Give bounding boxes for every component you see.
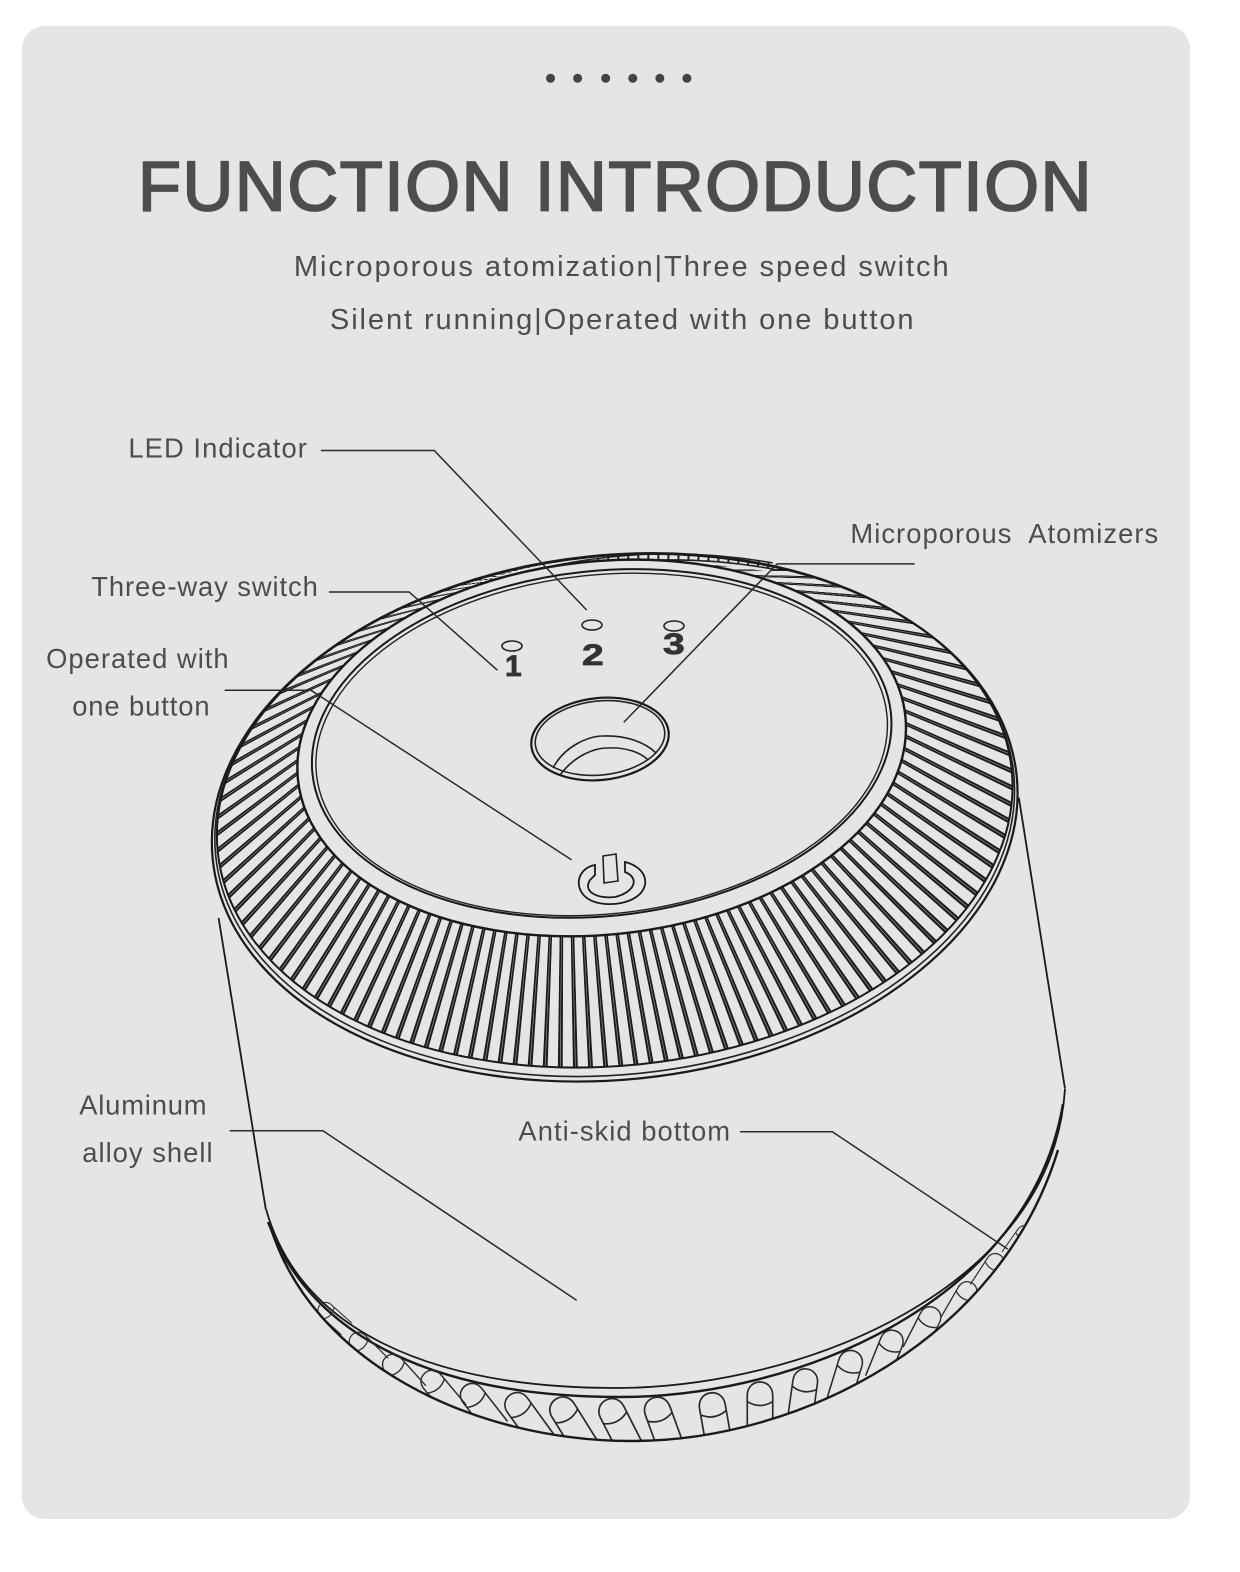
illustration: humidifier line drawing — [210, 552, 1066, 1442]
label: anti-skid bottom — [518, 1116, 1008, 1249]
device outlines — [210, 552, 1066, 1442]
label: operated with one button: Operated with — [46, 643, 229, 674]
label: three-way switch: Three-way switch — [91, 571, 318, 602]
cylinder body sides — [219, 798, 1065, 1209]
label: three-way switch — [91, 571, 497, 670]
decorative dot row — [546, 74, 691, 83]
text group — [46, 74, 1158, 1300]
base bottom edge — [270, 1150, 1058, 1441]
label: aluminum alloy shell — [79, 1090, 577, 1300]
label: LED indicator — [128, 432, 587, 610]
subtitle line 1: Microporous atomization|Three speed switch — [294, 251, 949, 283]
atomizer hole — [527, 691, 673, 787]
label: aluminum alloy shell: alloy shell — [82, 1137, 213, 1168]
LED indicators and speed numbers: 3 — [663, 628, 685, 661]
LED indicators and speed numbers — [502, 620, 685, 683]
label: anti-skid bottom: Anti-skid bottom — [518, 1116, 730, 1147]
label: operated with one button: one button — [72, 690, 210, 721]
ribbed top band — [218, 565, 1012, 1066]
beaded top edge — [501, 557, 772, 582]
label: operated with one button — [46, 643, 572, 860]
anti-skid feet — [318, 1225, 1024, 1440]
outer rim of top band — [185, 514, 1044, 1120]
LED indicators and speed numbers: 2 — [582, 639, 604, 672]
top ring and face — [279, 530, 925, 965]
power button icon — [579, 854, 645, 904]
top assembly outlines — [185, 514, 1065, 1209]
LED indicators and speed numbers: 1 — [505, 650, 522, 683]
label: microporous atomizers — [624, 518, 1158, 722]
label: microporous atomizers: Microporous Atomizers — [850, 518, 1158, 549]
label: aluminum alloy shell: Aluminum — [79, 1090, 207, 1121]
title: FUNCTION INTRODUCTION — [138, 147, 1092, 226]
subtitle line 2: Silent running|Operated with one button — [330, 304, 914, 336]
label: LED indicator: LED Indicator — [128, 432, 307, 464]
base rim — [266, 1089, 1065, 1397]
